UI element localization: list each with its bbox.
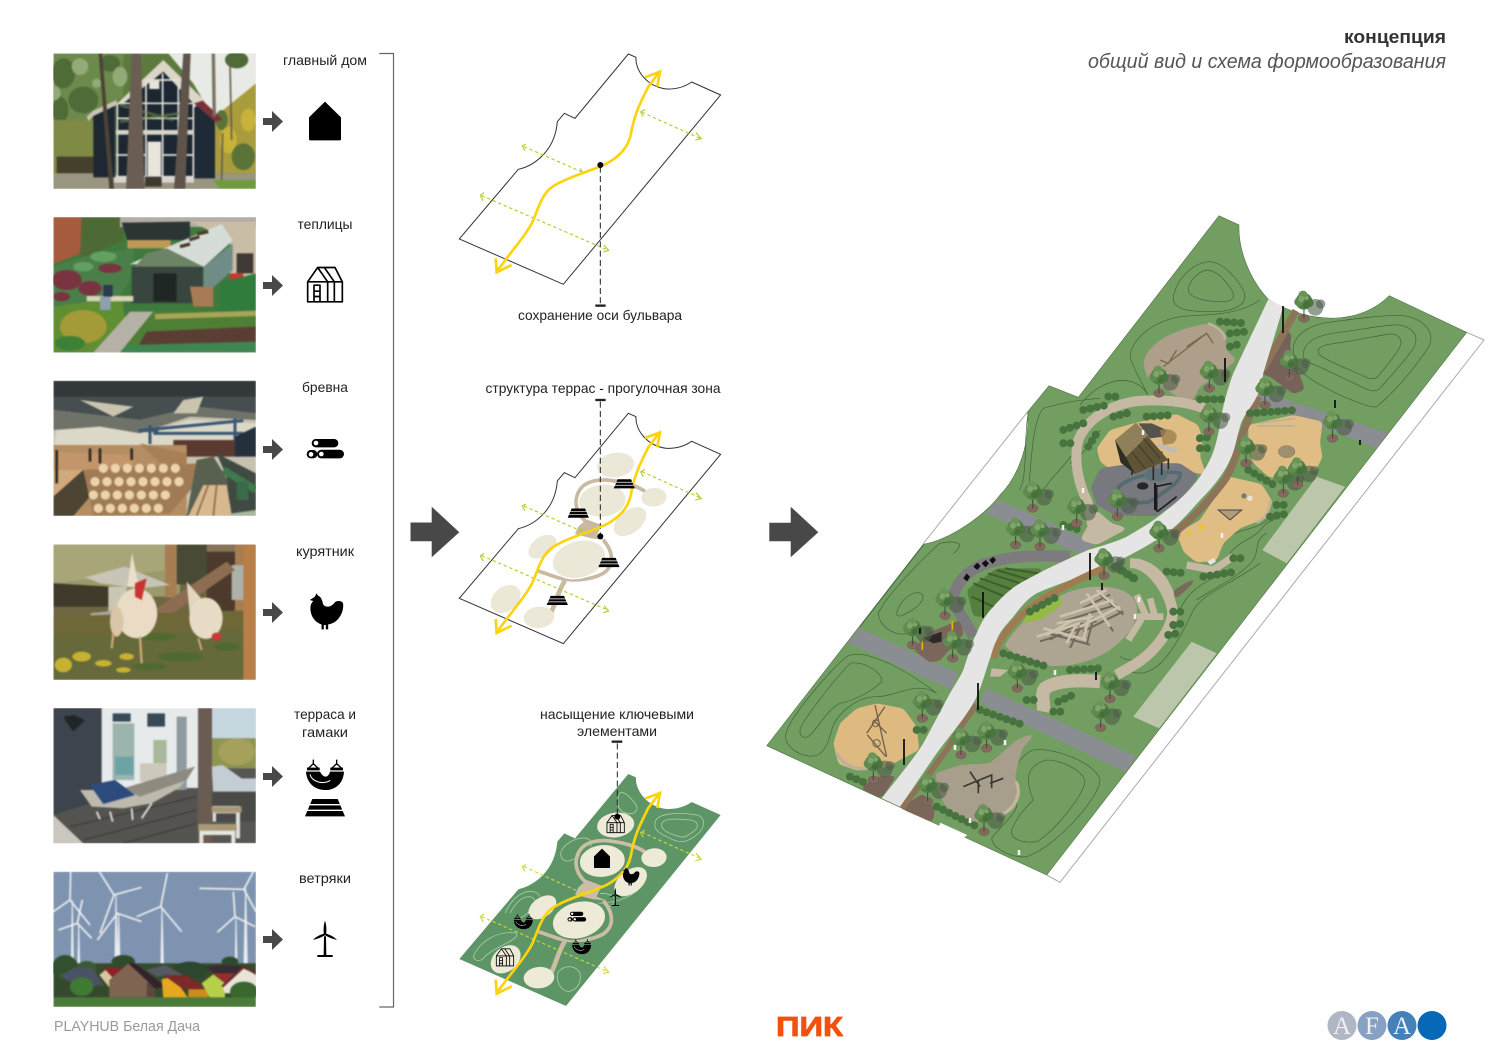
icon: chicken xyxy=(310,593,343,629)
icon: terrace xyxy=(305,799,345,816)
diagram 2: terrace structure xyxy=(459,400,721,644)
icon: house xyxy=(309,102,341,140)
photo: terrace and hammock xyxy=(53,708,256,843)
plan central boulevard xyxy=(882,299,1283,807)
plan stone retaining wall xyxy=(995,568,1103,655)
bracket xyxy=(379,54,394,1007)
plan lawn contour lines xyxy=(1019,262,1431,600)
plan lawn xyxy=(767,216,1467,875)
icon: greenhouse xyxy=(308,268,342,302)
element labels: бревна xyxy=(302,379,348,395)
label: key elements xyxy=(540,706,694,739)
diagram 1: boulevard axis xyxy=(459,54,721,306)
title block xyxy=(1088,27,1446,73)
big arrow left xyxy=(410,507,459,557)
plan trees, lower half xyxy=(864,588,1131,836)
footer: AFA logo: A xyxy=(1393,1013,1411,1040)
label: boulevard axis: сохранение оси бульвара xyxy=(518,307,682,323)
icon: wind turbine xyxy=(313,921,337,957)
label: terraces: структура террас - прогулочная зона xyxy=(486,380,721,396)
site plan: isometric masterplan xyxy=(767,216,1484,882)
element labels: терраса и xyxy=(294,706,356,722)
element labels xyxy=(283,52,367,886)
plan surfaces, lower half xyxy=(833,556,1200,838)
icon: logs xyxy=(307,439,344,458)
icon: hammock xyxy=(306,760,344,790)
photo: chicken coop xyxy=(53,544,256,680)
diagram 3: key elements xyxy=(459,742,721,1006)
footer: AFA logo xyxy=(1328,1011,1446,1040)
title block: общий вид и схема формообразования xyxy=(1088,51,1446,73)
element labels: главный дом xyxy=(283,52,367,68)
plan surfaces, upper half xyxy=(1076,311,1323,597)
plan paved strips xyxy=(1133,477,1345,728)
photo: greenhouses xyxy=(52,217,257,353)
big arrow right xyxy=(769,507,818,557)
label: key elements: элементами xyxy=(577,723,657,739)
footer: AFA logo: A xyxy=(1333,1013,1351,1040)
element labels: теплицы xyxy=(298,216,352,232)
photo: wind turbines xyxy=(52,872,258,1007)
plan outer site outline xyxy=(923,332,1484,882)
footer: PIK logo: ПИК xyxy=(776,1011,844,1042)
element labels: гамаки xyxy=(302,724,348,740)
arrows between photos and icons xyxy=(263,111,283,950)
plan main house playground xyxy=(1115,423,1180,512)
plan log climbing area xyxy=(990,563,1173,712)
element labels: ветряки xyxy=(299,870,351,886)
plan lamps and figures xyxy=(904,306,1360,855)
photo: logs xyxy=(53,381,256,516)
plan grey roads xyxy=(847,392,1388,772)
title block: концепция xyxy=(1344,27,1446,47)
footer: project name: PLAYHUB Белая Дача xyxy=(54,1018,201,1035)
plan shrubs xyxy=(850,322,1297,827)
photo: main house xyxy=(46,52,256,189)
footer: AFA logo: F xyxy=(1365,1013,1379,1040)
plan trees, upper half xyxy=(1006,291,1354,580)
element labels: курятник xyxy=(296,543,355,559)
label: key elements: насыщение ключевыми xyxy=(540,706,694,722)
